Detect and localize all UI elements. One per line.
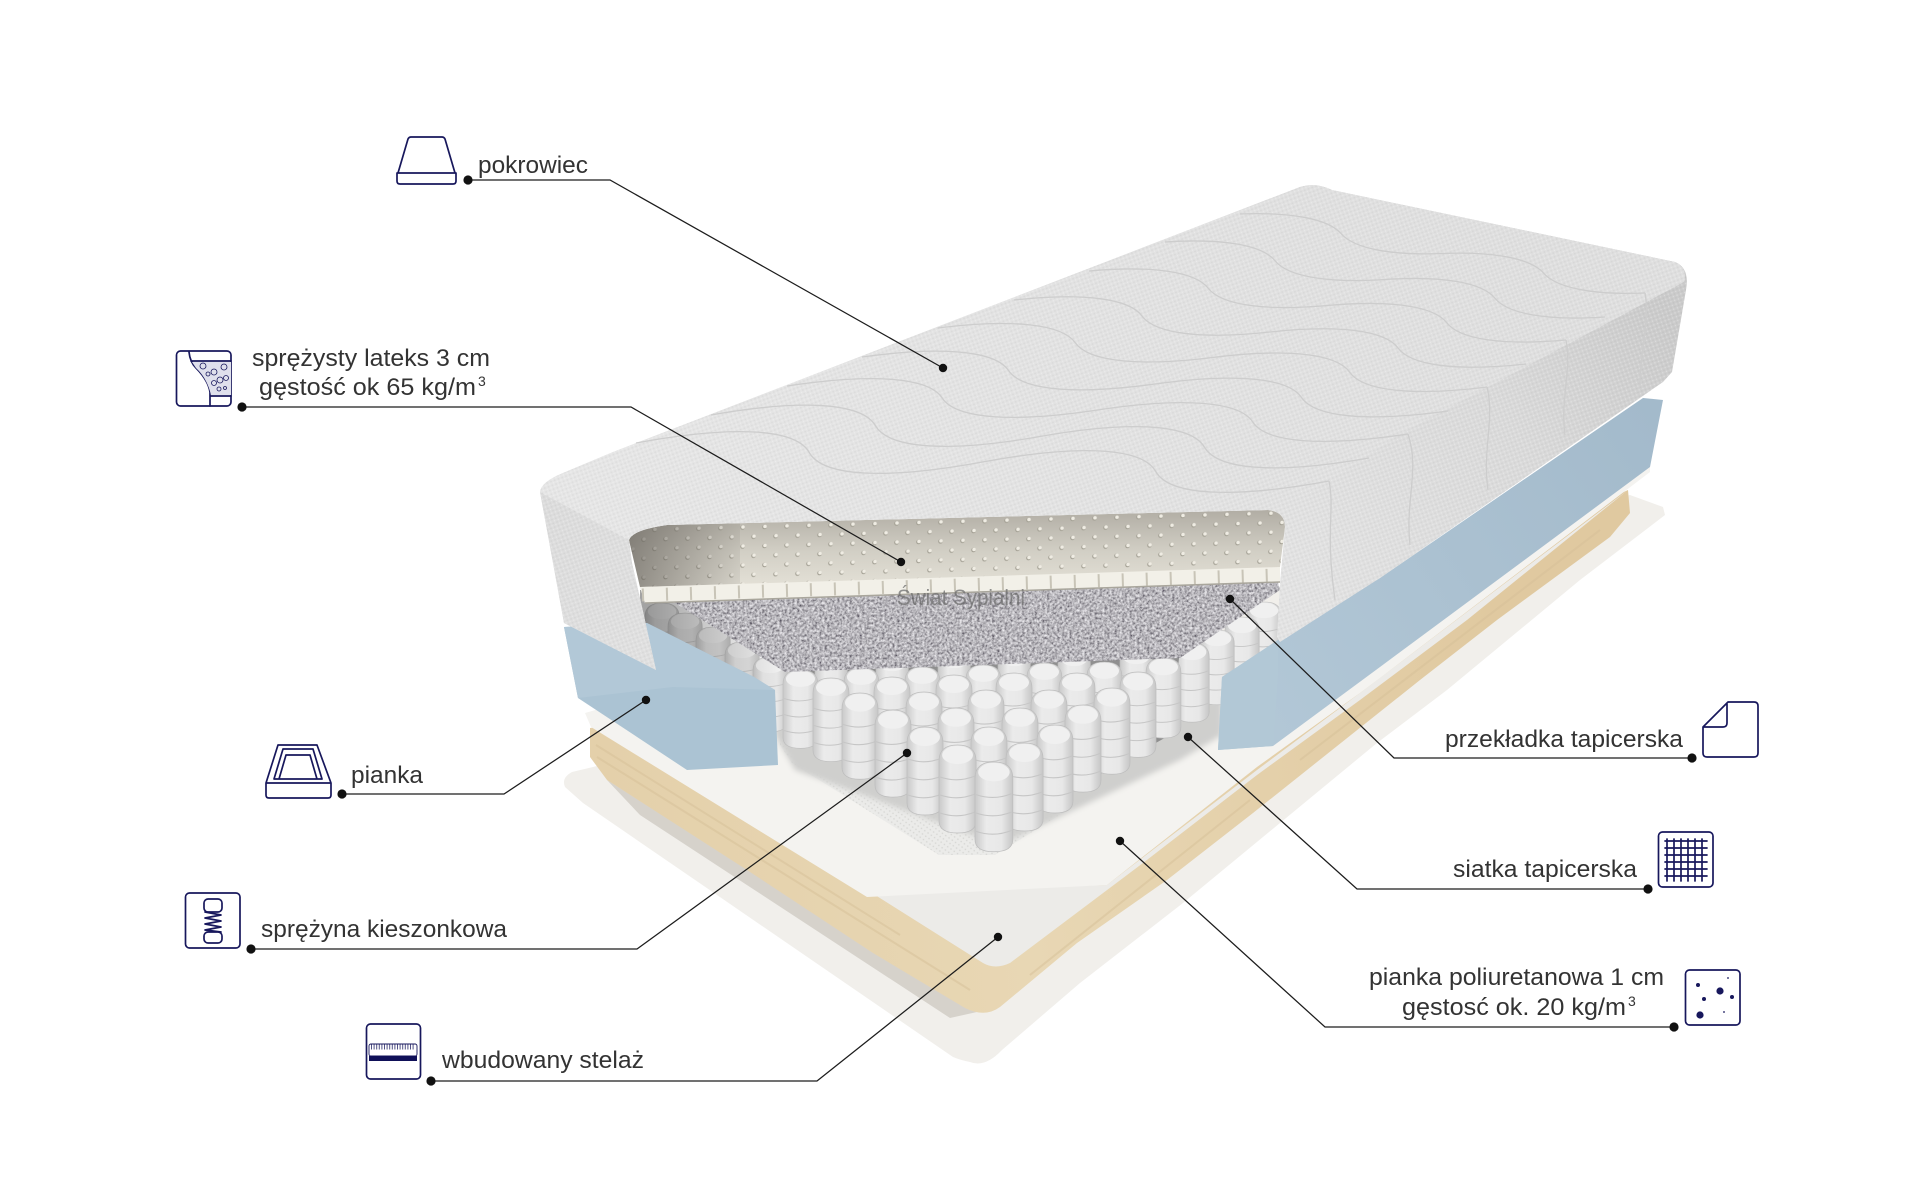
upholstery mesh (780, 690, 1213, 855)
shadow strip below the frame (607, 780, 977, 1018)
label: sprężysty lateks 3 cm, gęstość: 3 (478, 373, 486, 389)
pianka: left blue foam (564, 623, 778, 770)
leader line (237, 402, 905, 566)
side springs (645, 602, 1281, 732)
icon: folded sheet (1703, 702, 1758, 757)
watermark: Świat Sypialni (897, 585, 1025, 610)
mattress cover: pokrowiec (540, 185, 1687, 670)
quilting stitches (604, 208, 1660, 600)
pianka: right blue foam (1218, 398, 1663, 750)
label: pianka poliuretanowa 1 cm, gęstość: pianka poliuretanowa 1 cm (1369, 964, 1664, 991)
felt upholstery pad: przekładka tapicerska (642, 578, 1280, 672)
latex layer (629, 510, 1285, 603)
label: przekładka tapicerska: przekładka tapicerska (1445, 726, 1683, 753)
leader line (246, 749, 911, 954)
pocket springs (783, 648, 1181, 852)
leader line (1226, 595, 1697, 763)
label: sprężysty lateks 3 cm, gęstość (252, 345, 490, 401)
callout: wbudowany stelaż (366, 933, 1002, 1086)
icon: built-in frame (366, 1024, 420, 1079)
callout: pianka poliuretanowa (1116, 837, 1740, 1032)
icon: mattress cover (397, 137, 456, 184)
callout: sprężysty lateks (176, 345, 905, 566)
label: wbudowany stelaż: wbudowany stelaż (441, 1047, 644, 1074)
wooden frame (590, 490, 1630, 1013)
callout: przekładka tapicerska (1226, 595, 1758, 763)
label: siatka tapicerska: siatka tapicerska (1453, 856, 1637, 883)
label: pianka poliuretanowa 1 cm, gęstość: gęstosć ok. 20 kg/m (1402, 994, 1626, 1021)
leader line (463, 175, 947, 372)
leader line (337, 696, 650, 799)
label: pianka poliuretanowa 1 cm, gęstość: 3 (1628, 993, 1636, 1009)
label: pokrowiec: pokrowiec (478, 152, 588, 179)
spring block shadow fill (790, 650, 1180, 830)
callout: pianka (266, 696, 650, 799)
callout: sprężyna kieszonkowa (186, 749, 911, 954)
bottom sheet under the frame (564, 495, 1665, 1064)
callout: siatka tapicerska (1184, 733, 1713, 894)
label: pianka poliuretanowa 1 cm, gęstość (1369, 964, 1664, 1021)
mattress illustration (540, 185, 1687, 1064)
callout: pokrowiec (397, 137, 947, 372)
shadow behind the spring block (775, 640, 1222, 845)
label: sprężyna kieszonkowa: sprężyna kieszonkowa (261, 916, 507, 943)
label: sprężysty lateks 3 cm, gęstość: gęstość ok 65 kg/m (259, 374, 476, 401)
foam board: pianka poliuretanowa (585, 460, 1650, 897)
label: pianka: pianka (351, 762, 423, 789)
icon: foam frame (266, 745, 331, 798)
label: sprężysty lateks 3 cm, gęstość: sprężysty lateks 3 cm (252, 345, 490, 372)
shade over the rear springs (640, 590, 790, 700)
leader line (426, 933, 1002, 1086)
icon: mesh (1658, 832, 1713, 887)
icon: pocket spring (186, 893, 240, 948)
inner white sheet (872, 490, 1628, 966)
leader line (1116, 837, 1679, 1032)
icon: foam dots (1686, 970, 1740, 1025)
leader line (1184, 733, 1653, 894)
icon: latex (176, 351, 231, 406)
